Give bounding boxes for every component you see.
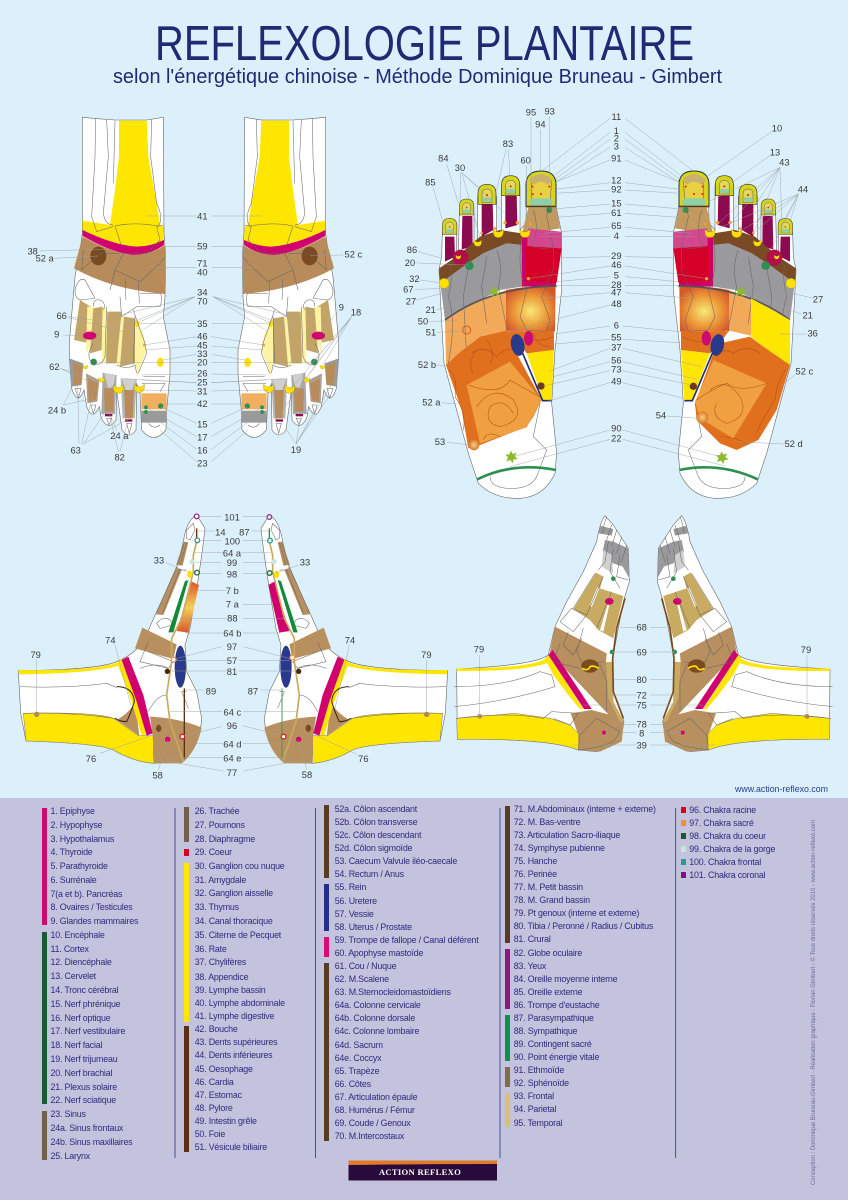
legend column 4: 72. M. Bas-ventre [514, 817, 581, 827]
right plantar foot upper zones [625, 118, 796, 498]
labels: medial view: 88 [227, 614, 238, 624]
labels: plantar view: 52 a [422, 397, 441, 407]
legend column 4 [514, 804, 656, 1128]
labels: lateral view: 72 [636, 691, 647, 701]
labels: lateral view: 69 [636, 647, 647, 657]
labels: lateral view: 78 [636, 720, 647, 730]
legend column 2: 34. Canal thoracique [195, 916, 273, 926]
legend column 4: 73. Articulation Sacro-iliaque [514, 830, 620, 840]
labels: plantar view: 56 [611, 355, 622, 365]
legend column 4: 94. Parietal [514, 1104, 556, 1114]
labels: lateral view: 8 [639, 728, 644, 738]
legend column 1: 24a. Sinus frontaux [50, 1123, 124, 1133]
legend column 4: 77. M. Petit bassin [514, 882, 583, 892]
legend column 2: 29. Coeur [195, 847, 232, 857]
legend column 4: 87. Parasympathique [514, 1013, 594, 1023]
labels: dorsal view: 23 [197, 458, 208, 468]
labels: plantar view: 20 [405, 258, 415, 268]
legend column 5 [689, 805, 775, 880]
labels: medial view: 87 [248, 686, 258, 696]
labels: plantar view: 50 [418, 317, 428, 327]
labels: medial view: 58 [302, 770, 312, 780]
labels: plantar view: 22 [611, 434, 622, 444]
legend column 2: 36. Rate [195, 944, 227, 954]
labels: plantar view: 49 [611, 376, 622, 386]
labels: plantar view: 3 [614, 142, 619, 152]
labels: medial view: 57 [227, 656, 237, 666]
legend column 3: 65. Trapèze [335, 1066, 380, 1076]
labels: plantar view: 21 [425, 305, 436, 315]
labels: plantar view: 21 [802, 311, 813, 321]
legend column 5: 98. Chakra du coeur [689, 831, 766, 841]
labels: dorsal view: 42 [197, 399, 208, 409]
labels: medial view: 97 [227, 642, 237, 652]
legend column 3: 52d. Côlon sigmoïde [335, 843, 413, 853]
legend column 1: 6. Surrénale [50, 875, 97, 885]
labels: medial view: 101 [224, 512, 240, 522]
legend column 1: 8. Ovaires / Testicules [50, 902, 133, 912]
legend column 1: 19. Nerf trijumeau [50, 1054, 118, 1064]
legend column 4: 88. Sympathique [514, 1026, 578, 1036]
legend column 1: 23. Sinus [50, 1109, 86, 1119]
labels: plantar view: 4 [614, 231, 619, 241]
labels: medial view: 64 c [224, 707, 241, 717]
labels: plantar view: 53 [435, 437, 445, 447]
legend column 1: 14. Tronc cérébral [50, 985, 119, 995]
panel: plantar view of feet [403, 107, 823, 498]
legend column 3: 64a. Colonne cervicale [335, 1000, 421, 1010]
legend column 1: 20. Nerf brachial [50, 1068, 112, 1078]
labels: plantar view: 92 [611, 185, 622, 195]
labels: medial view: 99 [227, 558, 237, 568]
legend column 2: 44. Dents inférieures [195, 1050, 273, 1060]
labels: plantar view: 1 [614, 126, 619, 136]
labels: dorsal view: 62 [49, 362, 60, 372]
labels: dorsal view: 34 [197, 288, 208, 298]
labels: plantar view: 95 [526, 108, 536, 118]
legend column 2: 39. Lymphe bassin [195, 985, 266, 995]
legend column 2: 30. Ganglion cou nuque [195, 861, 285, 871]
legend column 1: 3. Hypothalamus [50, 834, 115, 844]
right foot: spleen, colon, rectum [679, 298, 790, 479]
legend column 2: 40. Lymphe abdominale [195, 998, 285, 1008]
labels: plantar view: 13 [770, 147, 780, 157]
legend column 2: 27. Poumons [195, 820, 246, 830]
labels: plantar view: 5 [614, 271, 619, 281]
labels: dorsal view: 24 b [48, 406, 66, 416]
legend column 4: 95. Temporal [514, 1118, 563, 1128]
legend column 1: 4. Thyroide [50, 847, 93, 857]
labels: dorsal view: 71 [197, 258, 208, 268]
labels: plantar view: 90 [611, 423, 622, 433]
panel: medial view of feet [18, 512, 448, 781]
labels: medial view: 14 [215, 527, 226, 537]
vertical credit line: Conception : Dominique Bruneau-Gimbert - Réalisation graphique : Florian Gimbert - © Tous droits réservés 2010 - www.action-reflexo.com [810, 820, 817, 1185]
legend column 3: 68. Humérus / Fémur [335, 1105, 415, 1115]
legend column 1: 16. Nerf optique [50, 1013, 111, 1023]
right medial: pancreas, nerves, chakras [267, 515, 311, 762]
labels: medial view: 76 [86, 754, 96, 764]
right dorsal foot [211, 117, 339, 462]
legend column 2: 42. Bouche [195, 1024, 238, 1034]
labels: plantar view: 48 [611, 299, 622, 309]
labels: plantar view: 44 [798, 185, 808, 195]
legend column 1: 15. Nerf phrénique [50, 999, 121, 1009]
legend column 1: 25. Larynx [50, 1151, 91, 1161]
labels: dorsal view: 24 a [110, 431, 129, 441]
legend column 4: 75. Hanche [514, 856, 557, 866]
labels: medial view: 100 [225, 537, 240, 547]
legend column 2: 47. Estomac [195, 1090, 243, 1100]
legend column 2: 45. Oesophage [195, 1064, 253, 1074]
labels: medial view: 7 a [226, 599, 240, 609]
legend column 4: 80. Tibia / Peronné / Radius / Cubitus [514, 921, 654, 931]
labels: lateral view: 68 [636, 623, 647, 633]
labels: plantar view: 84 [438, 154, 449, 164]
left foot: colon, intestines, kidney [446, 331, 556, 479]
labels: dorsal view: 18 [351, 307, 361, 317]
legend column 4: 84. Oreille moyenne interne [514, 974, 618, 984]
left plantar foot upper zones [439, 118, 610, 498]
labels: medial view: 64 e [223, 754, 241, 764]
legend column 1: 11. Cortex [50, 944, 90, 954]
labels: plantar view: 86 [407, 245, 417, 255]
legend colour bars [42, 805, 686, 1160]
labels: medial view: 79 [421, 650, 432, 660]
labels: lateral view: 39 [636, 741, 647, 751]
labels: plantar view: 91 [611, 154, 622, 164]
legend column 1: 7(a et b). Pancréas [50, 889, 123, 899]
left dorsal foot [69, 117, 197, 462]
labels: plantar view: 54 [656, 410, 666, 420]
left medial foot base [18, 515, 205, 763]
labels: medial view: 81 [227, 667, 237, 677]
legend column 3: 57. Vessie [335, 909, 374, 919]
labels: dorsal view: 25 [197, 378, 208, 388]
labels: dorsal view: 59 [197, 242, 208, 252]
legend column 1: 2. Hypophyse [50, 820, 103, 830]
labels: lateral view: 79 [801, 645, 811, 655]
labels: medial view: 79 [30, 650, 41, 660]
legend column 4: 83. Yeux [514, 961, 547, 971]
knee points [34, 712, 429, 717]
labels: plantar view: 52 c [796, 366, 813, 376]
labels: plantar view: 29 [611, 251, 622, 261]
legend column 4: 86. Trompe d'eustache [514, 1000, 600, 1010]
legend column 2: 35. Citerne de Pecquet [195, 930, 282, 940]
labels: plantar view: 94 [535, 120, 546, 130]
labels: plantar view: 67 [403, 285, 414, 295]
legend column 3: 62. M.Scalene [335, 974, 389, 984]
legend column 3: 64d. Sacrum [335, 1040, 383, 1050]
labels: dorsal view: 9 [54, 330, 59, 340]
legend column 4: 71. M.Abdominaux (interne + externe) [514, 804, 656, 814]
labels: dorsal view: 45 [197, 340, 208, 350]
labels: plantar view: 85 [425, 177, 436, 187]
logo: Action Reflexo: ACTION REFLEXO [379, 1167, 461, 1177]
legend column 5: 101. Chakra coronal [689, 870, 766, 880]
legend column 4: 82. Globe oculaire [514, 948, 582, 958]
legend column 1: 13. Cervelet [50, 971, 97, 981]
legend column 3: 67. Articulation épaule [335, 1092, 418, 1102]
labels: medial view: 33 [154, 555, 164, 565]
labels: dorsal view: 9 [339, 302, 344, 312]
legend column 2: 38. Appendice [195, 972, 249, 982]
legend column 1: 18. Nerf facial [50, 1040, 102, 1050]
labels: plantar view: 65 [611, 221, 622, 231]
legend column 1: 12. Diencéphale [50, 957, 112, 967]
labels: plantar view: 46 [611, 260, 622, 270]
website url: www.action-reflexo.com [734, 784, 828, 794]
left medial: pancreas, nerves, chakras [156, 514, 200, 762]
legend column 2: 46. Cardia [195, 1077, 234, 1087]
legend column 3: 54. Rectum / Anus [335, 869, 405, 879]
panel: dorsal view of feet [27, 117, 362, 468]
legend column 2: 33. Thymus [195, 902, 240, 912]
legend column 2: 31. Amygdale [195, 875, 246, 885]
legend column 3: 66. Côtes [335, 1079, 372, 1089]
legend column 5: 100. Chakra frontal [689, 857, 761, 867]
labels: medial view: 98 [227, 570, 237, 580]
legend column 2: 26. Trachée [195, 806, 240, 816]
legend column 2: 32. Ganglion aisselle [195, 888, 273, 898]
legend column 4: 81. Crural [514, 934, 551, 944]
right medial foot base [261, 515, 448, 763]
legend column 3: 61. Cou / Nuque [335, 961, 397, 971]
legend column 1 [50, 806, 139, 1161]
labels: plantar view: 36 [807, 329, 818, 339]
legend column 1: 1. Epiphyse [50, 806, 95, 816]
labels: dorsal view: 35 [197, 319, 208, 329]
labels: dorsal view [27, 211, 362, 468]
logo: Action Reflexo [348, 1160, 497, 1180]
legend column 2 [195, 806, 285, 1152]
legend column 3: 53. Caecum Valvule iléo-caecale [335, 856, 457, 866]
subtitle: selon l'énergétique chinoise - Méthode Dominique Bruneau - Gimbert [113, 66, 722, 88]
labels: dorsal view: 63 [70, 445, 81, 455]
legend column 5: 99. Chakra de la gorge [689, 844, 775, 854]
labels: plantar view: 12 [611, 175, 622, 185]
legend column 3: 69. Coude / Genoux [335, 1118, 411, 1128]
right lateral foot [650, 516, 833, 752]
labels: dorsal view: 31 [197, 386, 208, 396]
legend column 3: 63. M.Sternocleidomastoïdiens [335, 987, 452, 997]
labels: medial view: 33 [300, 557, 310, 567]
labels: dorsal view: 66 [56, 311, 67, 321]
labels: lateral view [474, 623, 811, 751]
labels: dorsal view: 19 [291, 445, 301, 455]
legend column 3: 52c. Côlon descendant [335, 830, 422, 840]
legend column 3: 64e. Coccyx [335, 1053, 382, 1063]
labels: plantar view: 11 [611, 112, 621, 122]
legend column 2: 50. Foie [195, 1129, 225, 1139]
labels: dorsal view: 46 [197, 331, 208, 341]
labels: plantar view: 2 [614, 133, 619, 143]
legend column 2: 41. Lymphe digestive [195, 1011, 275, 1021]
legend column 4: 78. M. Grand bassin [514, 895, 590, 905]
labels: medial view: 74 [345, 635, 355, 645]
labels: plantar view: 28 [611, 280, 622, 290]
legend column 3: 64c. Colonne lombaire [335, 1026, 420, 1036]
legend column 4: 74. Symphyse pubienne [514, 843, 605, 853]
labels: medial view [30, 512, 432, 781]
labels: plantar view: 6 [614, 320, 619, 330]
labels: medial view: 96 [227, 721, 237, 731]
legend column 2: 37. Chylifères [195, 957, 247, 967]
labels: plantar view: 93 [544, 107, 555, 117]
legend column 4: 90. Point énergie vitale [514, 1052, 599, 1062]
labels: dorsal view: 52 a [36, 254, 55, 264]
labels: dorsal view: 52 c [345, 250, 362, 260]
legend column 3 [335, 804, 479, 1141]
labels: dorsal view: 20 [197, 358, 208, 368]
background: lower legend panel [0, 798, 848, 1200]
legend column 4: 76. Perinée [514, 869, 557, 879]
labels: dorsal view: 38 [27, 246, 38, 256]
labels: plantar view: 52 b [418, 360, 436, 370]
legend column 4: 89. Contingent sacré [514, 1039, 592, 1049]
labels: plantar view: 30 [455, 163, 465, 173]
labels: plantar view: 47 [611, 287, 622, 297]
labels: medial view: 58 [152, 771, 163, 781]
legend column 1: 24b. Sinus maxillaires [50, 1137, 133, 1147]
legend column 3: 64b. Colonne dorsale [335, 1013, 415, 1023]
labels: medial view: 64 a [223, 548, 242, 558]
labels: plantar view: 60 [520, 156, 531, 166]
labels: plantar view: 10 [772, 123, 782, 133]
labels: plantar view: 61 [611, 208, 622, 218]
labels: dorsal view: 41 [197, 211, 208, 221]
labels: dorsal view: 16 [197, 446, 208, 456]
labels: dorsal view: 15 [197, 420, 208, 430]
labels: plantar view: 27 [406, 296, 416, 306]
legend column 4: 79. Pt genoux (interne et externe) [514, 908, 639, 918]
legend column 3: 55. Rein [335, 882, 366, 892]
labels: plantar view: 37 [611, 342, 622, 352]
legend column 1: 10. Encéphale [50, 930, 105, 940]
background: upper sky-blue area [0, 0, 848, 798]
labels: medial view: 77 [227, 768, 237, 778]
legend column 5: 97. Chakra sacré [689, 818, 754, 828]
left lateral foot [454, 516, 637, 752]
labels: plantar view: 15 [611, 199, 622, 209]
labels: medial view: 76 [358, 754, 369, 764]
legend column 3: 58. Uterus / Prostate [335, 922, 412, 932]
labels: dorsal view: 33 [197, 349, 208, 359]
legend column 2: 48. Pylore [195, 1103, 233, 1113]
legend column 5: 96. Chakra racine [689, 805, 756, 815]
legend column 2: 51. Vésicule biliaire [195, 1142, 267, 1152]
legend column 4: 85. Oreille externe [514, 987, 583, 997]
labels: plantar view: 27 [813, 295, 823, 305]
labels: medial view: 64 b [223, 629, 241, 639]
legend column 4: 91. Ethmoïde [514, 1065, 564, 1075]
labels: plantar view: 43 [779, 157, 790, 167]
panel: lateral view of feet [454, 516, 833, 752]
legend column 1: 21. Plexus solaire [50, 1082, 117, 1092]
labels: plantar view: 51 [426, 328, 436, 338]
labels: dorsal view: 82 [114, 453, 125, 463]
legend column 4: 92. Sphénoïde [514, 1078, 569, 1088]
legend column 2: 43. Dents supérieures [195, 1037, 278, 1047]
labels: plantar view: 55 [611, 333, 622, 343]
labels: dorsal view: 70 [197, 296, 208, 306]
labels: medial view: 87 [239, 527, 250, 537]
legend column 1: 5. Parathyroide [50, 861, 108, 871]
labels: dorsal view: 26 [197, 369, 208, 379]
legend column 3: 56. Uretere [335, 896, 377, 906]
legend column 1: 17. Nerf vestibulaire [50, 1026, 125, 1036]
labels: plantar view: 73 [611, 365, 622, 375]
legend column 4: 93. Frontal [514, 1091, 554, 1101]
labels: medial view: 74 [105, 635, 116, 645]
labels: dorsal view: 40 [197, 267, 208, 277]
labels: lateral view: 79 [474, 644, 484, 654]
labels: plantar view: 83 [503, 139, 513, 149]
legend column 2: 49. Intestin grêle [195, 1116, 257, 1126]
labels: medial view: 89 [206, 686, 216, 696]
legend column 3: 52a. Côlon ascendant [335, 804, 418, 814]
labels: dorsal view: 17 [197, 433, 208, 443]
title: REFLEXOLOGIE PLANTAIRE [155, 17, 694, 71]
legend column 3: 70. M.Intercostaux [335, 1131, 405, 1141]
labels: plantar view: 32 [409, 274, 420, 284]
labels: medial view: 7 b [226, 586, 239, 596]
legend column 2: 28. Diaphragme [195, 834, 255, 844]
labels: medial view: 64 d [223, 739, 241, 749]
legend column 1: 22. Nerf sciatique [50, 1095, 116, 1105]
labels: lateral view: 80 [636, 675, 647, 685]
labels: plantar view: 52 d [785, 439, 803, 449]
labels: lateral view: 75 [636, 701, 647, 711]
legend column 1: 9. Glandes mammaires [50, 916, 139, 926]
legend column 3: 52b. Côlon transverse [335, 817, 418, 827]
legend column 3: 59. Trompe de fallope / Canal déférent [335, 935, 479, 945]
legend column 3: 60. Apophyse mastoïde [335, 948, 424, 958]
labels: plantar view [403, 107, 823, 449]
